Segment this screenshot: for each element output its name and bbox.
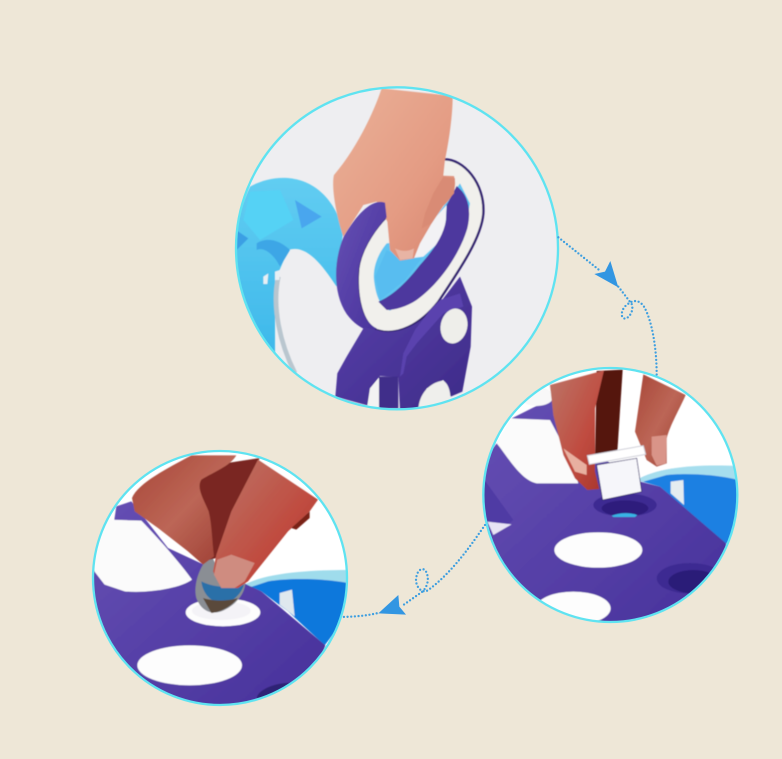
board sockets — [593, 493, 657, 517]
arrowhead — [594, 261, 618, 287]
white board cutouts — [534, 391, 552, 407]
white plug — [597, 458, 642, 500]
purple handle body — [335, 277, 472, 410]
blue seat — [640, 470, 736, 544]
infographic canvas — [92, 86, 738, 706]
white handle button — [440, 308, 468, 344]
dotted arrow: second to third step — [342, 525, 485, 617]
finger and thumb holding plug — [595, 370, 623, 458]
purple board — [88, 501, 325, 715]
coin — [195, 555, 245, 613]
photo circle: inserting white plug — [480, 365, 742, 632]
blue seat arc — [233, 178, 343, 357]
lower white openings — [418, 381, 451, 410]
cyan circle border — [483, 368, 737, 622]
purple inner band — [378, 186, 469, 310]
hand holding coin — [195, 458, 260, 561]
purple front band of handle — [336, 202, 387, 332]
blue seat — [246, 578, 346, 646]
hand gripping handle — [333, 88, 455, 261]
photo circle: turning screw with coin — [88, 448, 352, 715]
purple board — [480, 398, 733, 632]
arrowhead — [378, 595, 406, 615]
white board cutouts — [88, 520, 192, 592]
cyan circle border — [236, 87, 558, 409]
white socket ring — [186, 598, 260, 626]
white handle ring — [358, 159, 483, 332]
see-through handle opening — [374, 183, 470, 311]
dark corner socket — [256, 682, 290, 698]
cyan circle border — [93, 451, 347, 705]
photo circle: lifting the purple handle — [230, 80, 565, 415]
dotted arrow: first to second step — [558, 237, 657, 375]
